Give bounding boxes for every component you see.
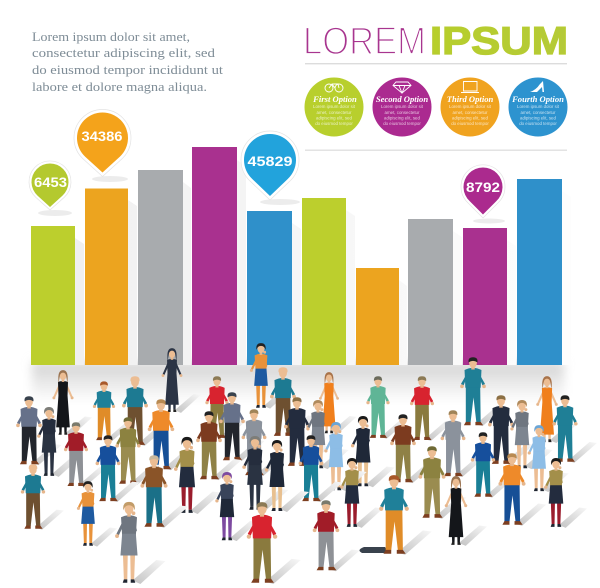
title bbox=[303, 20, 568, 63]
person: woman orange top left bbox=[77, 481, 117, 547]
option: fourth: do eiusmod tempor bbox=[519, 121, 557, 126]
person: bald man left bbox=[122, 376, 168, 446]
pin: 6453 bbox=[29, 161, 72, 216]
person: blue shirt man centre bbox=[299, 435, 343, 502]
option: first: do eiusmod tempor bbox=[315, 121, 353, 126]
paragraph text: Lorem ipsum dolor sit amet, bbox=[32, 30, 190, 44]
floor shadow bbox=[32, 362, 564, 402]
person: man foot on tyre bbox=[379, 475, 432, 555]
pin: 6453: 6453 bbox=[34, 174, 67, 190]
person: grey suit man bbox=[441, 410, 485, 477]
title: LOREM bbox=[303, 20, 426, 63]
person: big red shirt man bbox=[247, 502, 301, 584]
icon: laptop bbox=[461, 82, 479, 92]
person: dark suit man centre bbox=[284, 397, 330, 467]
person: woman black jumpsuit bbox=[52, 370, 92, 436]
option: first: amet, consectetur bbox=[317, 110, 352, 115]
person: nun bbox=[162, 348, 201, 413]
icon: tyre bbox=[359, 547, 386, 553]
option: fourth bbox=[508, 78, 568, 136]
person: woman with clipboard bbox=[115, 502, 165, 584]
option: first: First Option bbox=[312, 94, 357, 104]
option: third: Lorem ipsum dolor sit bbox=[449, 104, 492, 109]
person: mechanic woman right bbox=[552, 395, 597, 463]
person: woman black jumpsuit right bbox=[445, 476, 487, 546]
option: first bbox=[304, 78, 364, 136]
person: brown sweater man bbox=[196, 411, 242, 480]
person: woman orange top bbox=[250, 343, 290, 409]
person: orange sweater man right bbox=[498, 453, 546, 526]
person: soldier bbox=[115, 417, 160, 485]
person: purple hair woman bbox=[215, 472, 258, 541]
option: third: amet, consectetur bbox=[453, 110, 488, 115]
option: second: adipiscing elit, sed bbox=[384, 116, 420, 120]
person: professor bbox=[140, 455, 188, 528]
pin: 8792 bbox=[461, 165, 505, 224]
person: red shirt man right bbox=[410, 376, 453, 441]
person: woman grey suit bbox=[510, 400, 553, 469]
option: fourth: amet, consectetur bbox=[521, 110, 556, 115]
person: woman olive top bbox=[174, 437, 221, 514]
person: businesswoman centre bbox=[265, 440, 309, 512]
person: police woman left bbox=[16, 396, 62, 465]
person: brown sweater man right bbox=[390, 414, 436, 483]
person: woman with folder bbox=[37, 407, 80, 477]
person: dark red shirt man bbox=[64, 422, 107, 487]
option: third: do eiusmod tempor bbox=[451, 121, 489, 126]
option: third: Third Option bbox=[447, 94, 494, 104]
paragraph text: do eiusmod tempor incididunt ut bbox=[32, 63, 224, 77]
person: blue shirt man bbox=[471, 432, 514, 498]
paragraph text bbox=[32, 30, 224, 94]
icon: diamond bbox=[393, 82, 411, 93]
person: blue shirt man left bbox=[96, 435, 140, 502]
person: man orange trousers bbox=[93, 381, 132, 441]
option: second bbox=[372, 78, 432, 136]
pin: 45829: 45829 bbox=[248, 153, 293, 169]
pin: 8792: 8792 bbox=[466, 179, 500, 195]
icon: bicycle bbox=[325, 84, 343, 92]
option: second: amet, consectetur bbox=[385, 110, 420, 115]
person: woman orange dress right bbox=[536, 376, 577, 443]
person: medic bbox=[366, 376, 408, 439]
paragraph text: consectetur adipiscing elit, sed bbox=[32, 46, 216, 60]
person: woman orange dress bbox=[319, 372, 357, 434]
person: businesswoman bbox=[351, 416, 395, 487]
person: bald man far left bbox=[21, 464, 64, 530]
person: soldier right bbox=[418, 446, 466, 519]
pin: 34386 bbox=[74, 110, 131, 182]
option: third: adipiscing elit, sed bbox=[452, 116, 488, 120]
paragraph text: labore et dolore magna aliqua. bbox=[32, 80, 207, 94]
option: fourth: Fourth Option bbox=[511, 94, 564, 104]
option: second: do eiusmod tempor bbox=[383, 121, 421, 126]
person: mechanic woman bbox=[460, 357, 506, 426]
option: first: adipiscing elit, sed bbox=[316, 116, 352, 120]
person: red shirt man bbox=[205, 376, 247, 439]
option: second: Lorem ipsum dolor sit bbox=[381, 104, 424, 109]
person: dark suit man bbox=[488, 395, 534, 465]
pin: 34386: 34386 bbox=[82, 128, 123, 144]
pin: 45829 bbox=[241, 131, 300, 205]
title: IPSUM bbox=[430, 20, 568, 63]
person: woman olive top centre bbox=[340, 458, 383, 528]
person: bald man bbox=[270, 367, 316, 437]
bar chart bbox=[31, 147, 571, 365]
option: fourth: adipiscing elit, sed bbox=[520, 116, 556, 120]
option: fourth: Lorem ipsum dolor sit bbox=[517, 104, 560, 109]
person: police woman bbox=[219, 392, 265, 461]
person: nurse bbox=[324, 422, 367, 491]
option: second: Second Option bbox=[376, 94, 428, 104]
person: nurse right bbox=[528, 425, 569, 492]
person: woman olive top right bbox=[544, 458, 587, 528]
person: dark red shirt man centre bbox=[313, 500, 360, 571]
icon: high heel shoe bbox=[530, 81, 544, 92]
person: orange sweater man bbox=[148, 399, 195, 470]
person: woman grey suit centre bbox=[306, 400, 349, 469]
option: third bbox=[440, 78, 500, 136]
option: first: Lorem ipsum dolor sit bbox=[313, 104, 356, 109]
person: woman with folder centre bbox=[242, 436, 288, 511]
crowd of people bbox=[16, 343, 597, 584]
person: grey suit man centre bbox=[242, 409, 286, 476]
